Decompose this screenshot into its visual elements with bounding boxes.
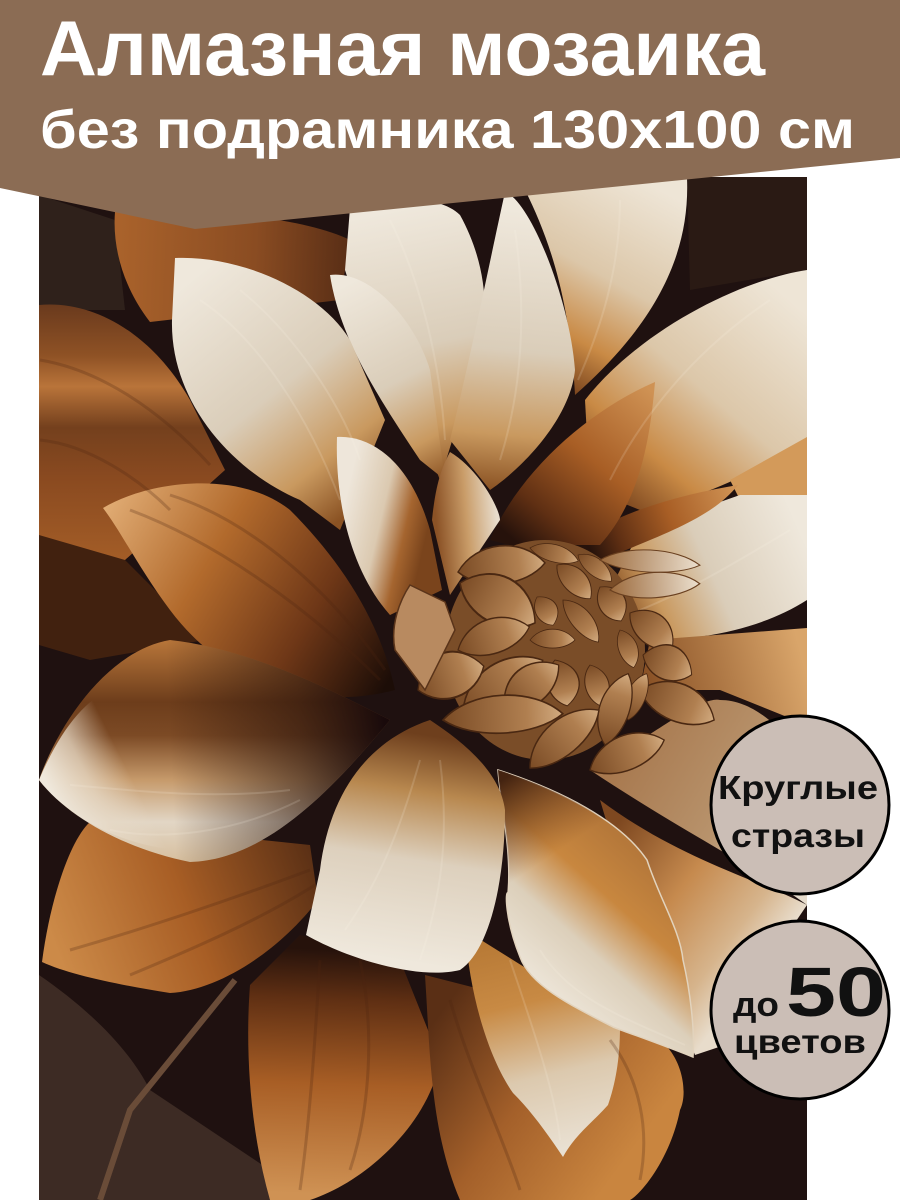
dark leaves top left (39, 195, 125, 310)
petal top centre narrow (450, 192, 575, 490)
petal base colour (498, 770, 693, 1057)
petal centre bottom white (306, 720, 505, 973)
dark painting background (39, 177, 807, 1200)
leaf blade lower left (39, 975, 275, 1200)
petal bottom orange (248, 935, 440, 1200)
subtitle: без подрамника 130х100 см (40, 100, 855, 160)
badge word up to: до (733, 986, 779, 1024)
inner petal front (394, 585, 455, 690)
back petal top left (115, 210, 350, 322)
badge: colours (711, 921, 889, 1099)
leaf stem (100, 980, 235, 1200)
petal right lower orange cream (600, 800, 807, 1055)
petal top centre (345, 199, 485, 480)
badge word colours: цветов (734, 1023, 866, 1060)
petal right white (610, 495, 807, 640)
badge circle (711, 716, 889, 894)
petal lower left white (39, 640, 390, 862)
petal texture streaks (94, 264, 708, 1080)
badge circle (711, 921, 889, 1099)
banner (0, 0, 900, 229)
petal orange upper centre (490, 382, 655, 545)
inner petal left (337, 437, 442, 615)
petal white tip (39, 702, 140, 843)
petal dark root shade (498, 770, 600, 878)
petal right edge orange (730, 437, 807, 500)
petal orange large left (103, 483, 395, 697)
flower painting (39, 177, 807, 1200)
badge number: 50 (786, 953, 886, 1031)
petal bottom left orange (42, 822, 318, 993)
dark leaf top right (687, 177, 807, 290)
petal upper left large (172, 258, 385, 530)
petal top right (525, 178, 687, 395)
petal dark inner shade (179, 642, 390, 862)
petal bottom right orange (425, 975, 684, 1200)
petal right lower tan (590, 700, 807, 905)
bud light outer scales (600, 547, 701, 601)
bottom leaf (39, 975, 275, 1200)
petal upper left narrow (330, 275, 445, 480)
petal right lower orange (643, 628, 807, 716)
badge: round rhinestones (711, 716, 889, 894)
back petal left (39, 304, 225, 560)
petal right large (585, 270, 807, 510)
bud scales (409, 538, 722, 784)
petal dark streaks (40, 360, 644, 1190)
petal bottom cream (465, 930, 620, 1157)
flower bud (409, 538, 722, 784)
inner petal small (432, 452, 500, 595)
petal thin orange right (588, 486, 734, 558)
badge text line one: Круглые (718, 769, 878, 806)
badge text line two: стразы (731, 817, 865, 854)
title: Алмазная мозаика (40, 4, 766, 92)
petal base colour (39, 640, 390, 862)
dark petal left (39, 535, 198, 660)
petal lower white right (498, 770, 693, 1057)
bud base (445, 540, 645, 760)
